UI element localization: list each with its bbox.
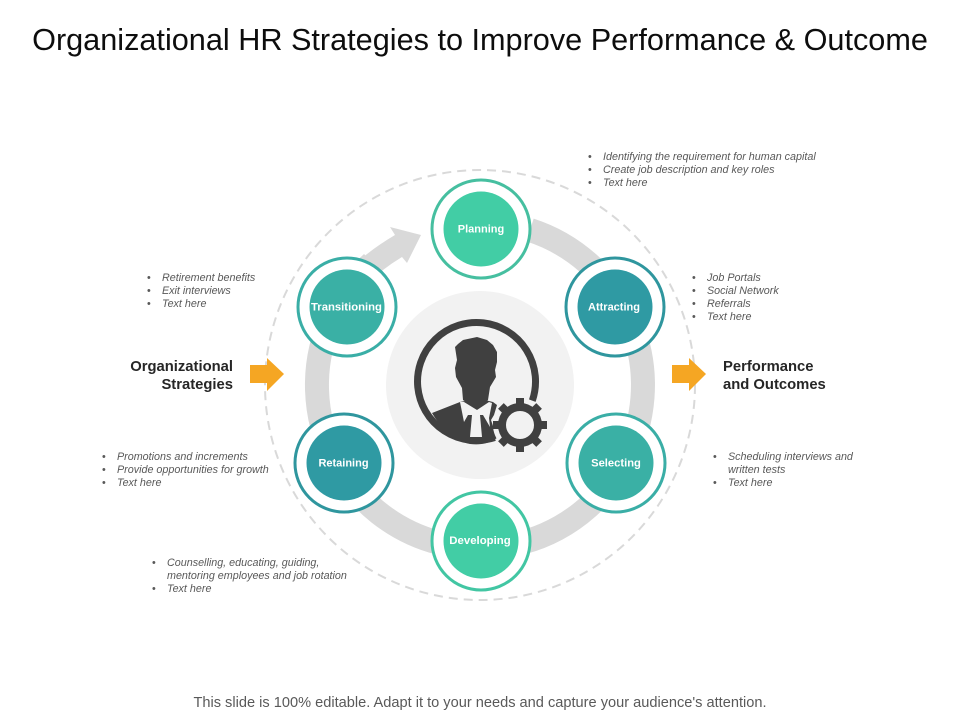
- text: selecting bullets: Text here: [728, 477, 772, 489]
- text: selecting bullets: written tests: [728, 464, 785, 476]
- arrow: left input: [250, 358, 284, 391]
- node: Attracting: Attracting: [588, 302, 640, 314]
- text: transitioning bullets: Retirement benefits: [162, 272, 255, 284]
- label: Performance and Outcomes: and Outcomes: [723, 377, 826, 393]
- text: selecting bullets: Scheduling interviews and: [728, 451, 853, 463]
- node: Retaining: Retaining: [318, 458, 369, 470]
- text: attracting bullets: Text here: [707, 311, 751, 323]
- text: retaining bullets: Promotions and increments: [117, 451, 248, 463]
- icon: person with gear: [418, 322, 547, 452]
- text: developing bullets: Counselling, educating, guiding,: [167, 557, 319, 569]
- node: Developing: Developing: [449, 535, 511, 547]
- text: retaining bullets: Provide opportunities for growth: [117, 464, 269, 476]
- text: attracting bullets: Social Network: [707, 285, 779, 297]
- grey cycle ring with arrow: [317, 227, 643, 548]
- text: planning bullets: Create job description and key roles: [603, 164, 774, 176]
- text: attracting bullets: Referrals: [707, 298, 751, 310]
- node: Planning: [432, 180, 530, 278]
- dashed outer circle: [265, 170, 695, 600]
- text: attracting bullets: Job Portals: [707, 272, 761, 284]
- text: transitioning bullets: Text here: [162, 298, 206, 310]
- footer: This slide is 100% editable. Adapt it to your needs and capture your audience's attention.: [193, 695, 767, 711]
- text: developing bullets: mentoring employees and job rotation: [167, 570, 347, 582]
- text: retaining bullets: Text here: [117, 477, 161, 489]
- node: Transitioning: Transitioning: [311, 302, 382, 314]
- node: Attracting: [566, 258, 664, 356]
- node: Selecting: Selecting: [591, 458, 641, 470]
- text: attracting bullets: [692, 272, 780, 323]
- node: Selecting: [567, 414, 665, 512]
- label: Organizational Strategies: Organizational: [130, 359, 233, 375]
- label: Organizational Strategies: [130, 359, 233, 393]
- text: transitioning bullets: Exit interviews: [162, 285, 231, 297]
- text: planning bullets: Text here: [603, 177, 647, 189]
- text: planning bullets: [588, 151, 816, 189]
- node: Retaining: [295, 414, 393, 512]
- arrow: right output: [672, 358, 706, 391]
- label: Organizational Strategies: Strategies: [161, 377, 233, 393]
- text: developing bullets: [152, 557, 347, 595]
- label: Performance and Outcomes: [723, 359, 826, 393]
- text: retaining bullets: [102, 451, 269, 489]
- text: planning bullets: Identifying the requirement for human capital: [603, 151, 816, 163]
- text: selecting bullets: [713, 451, 854, 489]
- text: developing bullets: Text here: [167, 583, 211, 595]
- node: Transitioning: [298, 258, 396, 356]
- icon: gear: [493, 398, 547, 452]
- node: Developing: [432, 492, 530, 590]
- node: Planning: Planning: [458, 224, 504, 236]
- central circle: [386, 291, 574, 479]
- label: Performance and Outcomes: Performance: [723, 359, 813, 375]
- title: Organizational HR Strategies to Improve Performance & Outcome: [32, 23, 928, 57]
- text: transitioning bullets: [147, 272, 255, 310]
